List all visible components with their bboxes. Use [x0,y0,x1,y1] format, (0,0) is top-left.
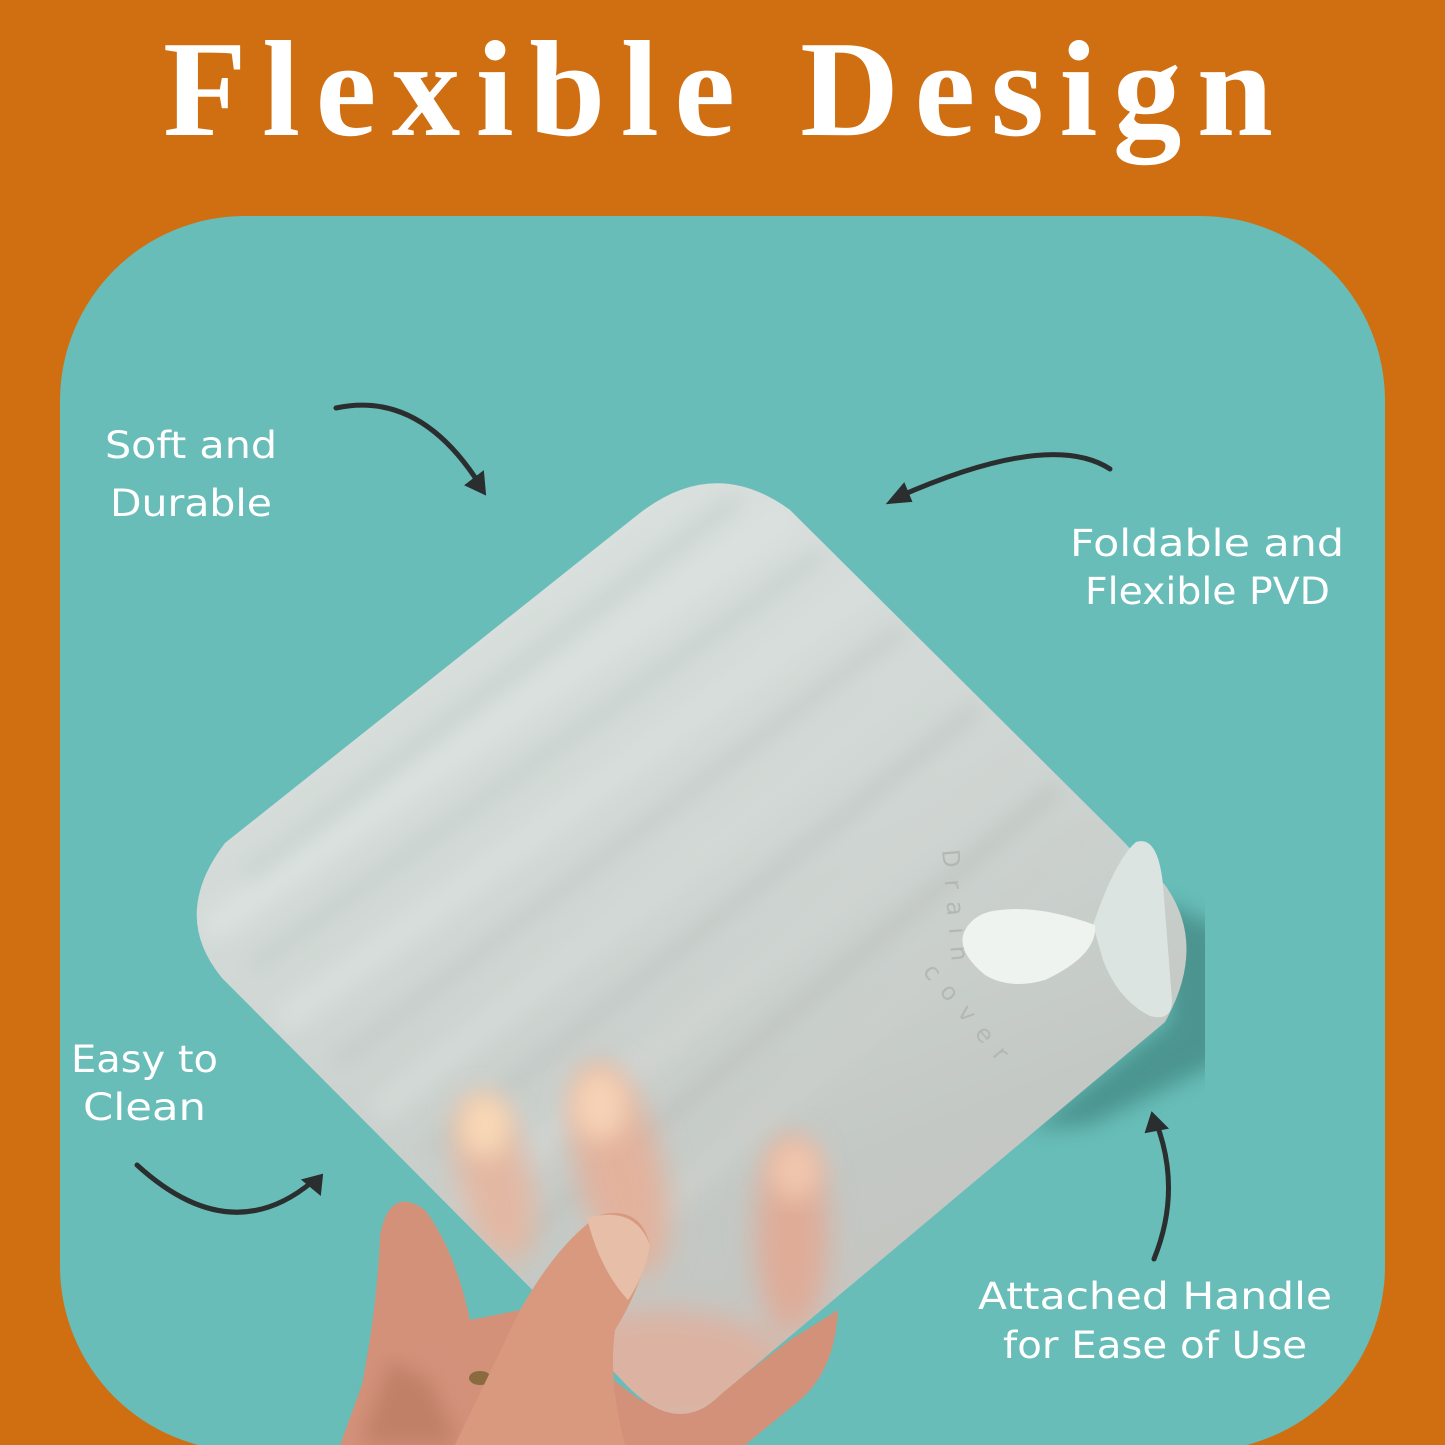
label: foldable and flexible [1070,522,1344,613]
arrow: soft and durable [336,405,485,494]
arrow: easy to clean [137,1165,322,1212]
embossed drain cover text: cover [917,958,1015,1066]
label: easy to clean [71,1038,218,1129]
mat shadow [1038,898,1205,1136]
label: attached handle: for Ease of Use [1003,1324,1307,1367]
arrow: attached handle [1146,1113,1169,1259]
blurred fingers through mat [440,1053,828,1430]
title: Flexible Design [163,13,1273,165]
label: attached handle [978,1275,1332,1367]
product photo [197,440,1225,1445]
teal panel [60,216,1385,1445]
embossed drain cover text: Drain [936,848,974,962]
embossed drain cover text [925,851,1008,1058]
label: easy to clean: Clean [83,1086,206,1129]
label: easy to clean: Easy to [71,1038,218,1081]
arrow: foldable [888,455,1110,503]
label: soft and durable: Soft and [105,424,277,467]
hand behind mat [340,1202,838,1445]
label: soft and durable [105,424,277,525]
label: foldable and flexible: Foldable and [1070,522,1344,565]
label: soft and durable: Durable [110,482,272,525]
mat ridges [197,502,1036,930]
label: foldable and flexible: Flexible PVD [1085,570,1330,613]
label: attached handle: Attached Handle [978,1275,1332,1318]
frosted mat [197,440,1186,1430]
ring [469,1371,491,1385]
handle [962,841,1172,1017]
thumb [455,1213,650,1445]
